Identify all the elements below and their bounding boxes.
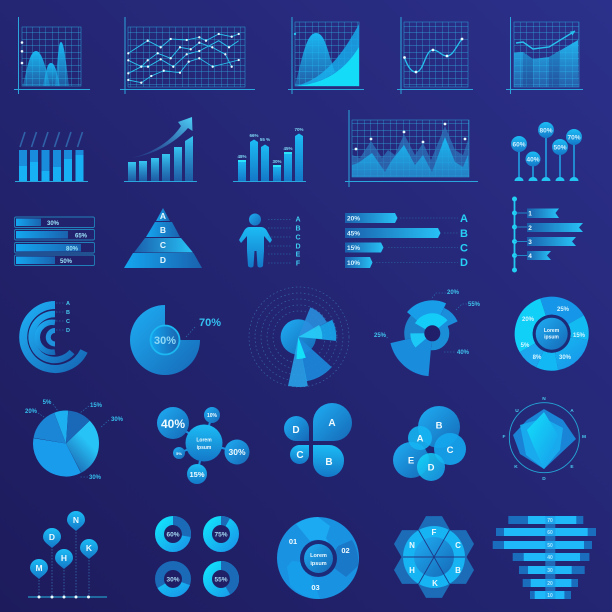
chart: progress bars: 30% bbox=[47, 221, 60, 227]
chart: pyramid: D bbox=[160, 255, 166, 265]
chart: growth bars with arrow bbox=[128, 117, 193, 181]
chart: pyramid: C bbox=[160, 240, 166, 250]
chart: hexagon flower: N bbox=[409, 541, 415, 550]
chart: overlapping circles: D bbox=[428, 462, 435, 474]
chart: swirl circle: 02 bbox=[341, 546, 350, 555]
chart: labelled donut: 5% bbox=[521, 343, 530, 349]
chart: radar: N bbox=[542, 396, 546, 402]
rose hole bbox=[424, 325, 440, 341]
chart: radar bbox=[503, 396, 586, 482]
chart: lollipop percentages: 40% bbox=[526, 156, 540, 164]
chart: balloon pins: N bbox=[73, 515, 79, 525]
chart: overlapping circles: C bbox=[447, 445, 454, 456]
chart: radar: A bbox=[570, 408, 574, 414]
chart: horizontal funnel bars: 40 bbox=[547, 555, 553, 561]
chart: hexagon flower: B bbox=[455, 566, 461, 575]
chart: pie with labels: 30% bbox=[111, 417, 124, 423]
chart: mountain area bbox=[345, 110, 478, 187]
chart: arrow bars ABCD: 15% bbox=[347, 245, 360, 252]
chart: progress bars: 50% bbox=[60, 259, 73, 265]
chart: pie with labels: 20% bbox=[25, 409, 38, 415]
chart: lollipop percentages: 50% bbox=[553, 144, 567, 152]
chart: smooth line bbox=[397, 17, 473, 94]
chart: hexagon flower: C bbox=[455, 541, 461, 550]
chart: labelled donut bbox=[513, 295, 590, 372]
chart: concentric arcs: A bbox=[66, 301, 70, 307]
chart: person with labels: C bbox=[295, 234, 301, 242]
chart: horizontal funnel bars: 20 bbox=[547, 581, 553, 587]
chart: arrow bars ABCD: D bbox=[460, 257, 468, 269]
chart: four small donuts: 60% bbox=[166, 532, 180, 538]
chart: arrow bars ABCD bbox=[345, 213, 468, 269]
chart: overlapping circles: B bbox=[436, 420, 443, 432]
chart: balloon pins: D bbox=[49, 532, 55, 542]
chart: horizontal funnel bars: 50 bbox=[547, 543, 553, 549]
chart: labelled donut: Lorem bbox=[544, 328, 560, 334]
chart: concentric arcs: B bbox=[66, 310, 70, 316]
chart: balloon pins: M bbox=[35, 563, 43, 573]
chart: bubble cluster: 40% bbox=[161, 417, 185, 431]
chart: 30/70 pie: 70% bbox=[199, 317, 221, 329]
chart: labelled donut: 15% bbox=[573, 333, 586, 339]
chart: arrow bars ABCD: 20% bbox=[347, 216, 360, 222]
chart: pie with labels: 5% bbox=[43, 400, 52, 406]
chart: bubble cluster: ipsum bbox=[197, 445, 212, 451]
chart: concentric arcs: C bbox=[66, 319, 70, 325]
chart: 30/70 pie bbox=[130, 305, 221, 375]
chart: pie with labels bbox=[25, 400, 124, 481]
chart: layered area with bell bbox=[288, 17, 364, 94]
chart: concentric arcs bbox=[23, 301, 84, 369]
chart: four small donuts bbox=[156, 520, 234, 596]
chart: swirl circle bbox=[277, 517, 359, 599]
chart: overlapping circles bbox=[393, 406, 466, 481]
chart: arrow bars ABCD: 10% bbox=[347, 260, 360, 267]
arrow: growth bbox=[132, 117, 192, 158]
chart: horizontal funnel bars: 10 bbox=[547, 593, 553, 599]
chart: rose with hole: 55% bbox=[468, 302, 481, 308]
chart: four petals: B bbox=[325, 457, 333, 468]
chart: person with labels: D bbox=[295, 244, 301, 250]
chart: labelled donut: ipsum bbox=[544, 334, 559, 340]
chart: hexagon flower: K bbox=[432, 579, 438, 588]
chart: arrow bars ABCD: A bbox=[460, 213, 468, 225]
chart: hexagon flower bbox=[394, 516, 474, 598]
chart: horizontal funnel bars: 60 bbox=[547, 530, 553, 536]
chart: lollipop percentages: 80% bbox=[539, 128, 553, 134]
chart: lollipop percentages: 70% bbox=[567, 134, 581, 142]
chart: pie with labels: 30% bbox=[89, 475, 102, 481]
chart: person with labels: E bbox=[296, 252, 301, 258]
chart: bubble cluster: 15% bbox=[189, 470, 205, 479]
chart: four small donuts: 75% bbox=[214, 532, 228, 538]
chart: pie with labels: 15% bbox=[90, 403, 103, 409]
chart: lollipop percentages: 60% bbox=[512, 142, 526, 148]
chart: radar: U bbox=[515, 408, 519, 414]
chart: vertical timeline with ribbons: 4 bbox=[528, 253, 532, 260]
chart: four line chart bbox=[120, 17, 255, 94]
chart: overlapping circles: E bbox=[408, 456, 414, 466]
chart: concentric arcs: D bbox=[66, 328, 70, 334]
chart: hexagon flower: H bbox=[409, 566, 415, 575]
chart: bubble cluster: Lorem bbox=[196, 438, 212, 444]
chart: swirl circle: 03 bbox=[311, 583, 320, 592]
chart: labelled donut: 8% bbox=[533, 355, 542, 361]
chart: arrow bars ABCD: B bbox=[460, 228, 468, 240]
chart: column area with trend line bbox=[506, 17, 583, 94]
chart: person with labels bbox=[239, 214, 301, 268]
chart: bubble cluster: 5% bbox=[176, 451, 182, 456]
chart: horizontal funnel bars: 30 bbox=[547, 568, 553, 574]
chart: balloon pins: H bbox=[61, 553, 67, 563]
chart: labelled donut: 20% bbox=[522, 317, 535, 323]
baseline: growth bbox=[124, 180, 197, 182]
chart: horizontal funnel bars: 70 bbox=[547, 518, 553, 524]
chart: horizontal funnel bars bbox=[493, 516, 596, 599]
chart: percent bars bbox=[233, 127, 306, 182]
chart: rose with hole: 40% bbox=[457, 350, 470, 356]
chart: four small donuts: 55% bbox=[214, 576, 228, 584]
chart: bubble cluster bbox=[157, 407, 250, 484]
chart: pyramid: B bbox=[160, 225, 166, 235]
chart: four petals: D bbox=[292, 425, 300, 436]
chart: arrow bars ABCD: 45% bbox=[347, 230, 360, 238]
chart: radar: M bbox=[582, 434, 586, 440]
chart: progress bars: 80% bbox=[66, 246, 79, 252]
chart: swirl circle: 01 bbox=[289, 537, 297, 546]
chart: 30/70 pie: 30% bbox=[154, 335, 176, 347]
chart: rose with hole bbox=[374, 290, 481, 357]
chart: swirl circle: Lorem bbox=[310, 553, 327, 559]
chart: rose with hole: 25% bbox=[374, 333, 387, 339]
chart: four small donuts: 30% bbox=[166, 576, 180, 584]
chart: percent bars: 48% bbox=[237, 154, 247, 159]
chart: pyramid: A bbox=[160, 211, 166, 221]
chart: pyramid bbox=[124, 208, 202, 268]
chart: vertical timeline with ribbons: 1 bbox=[528, 210, 532, 218]
chart: bubble cluster: 30% bbox=[228, 447, 246, 457]
chart: person with labels: F bbox=[296, 260, 301, 268]
chart: lollipop percentages bbox=[511, 122, 582, 181]
chart: balloon pins bbox=[28, 511, 107, 597]
chart: arrow bars ABCD: C bbox=[460, 242, 468, 254]
chart: four petals bbox=[284, 403, 352, 477]
chart: percent bars: 70% bbox=[294, 127, 304, 132]
chart: four petals: C bbox=[296, 450, 304, 461]
chart: labelled donut: 25% bbox=[557, 307, 570, 313]
chart: hexagon flower: F bbox=[432, 528, 437, 537]
chart: labelled donut: 30% bbox=[559, 355, 572, 361]
chart: vertical timeline with ribbons: 3 bbox=[528, 239, 532, 246]
chart: person with labels: B bbox=[295, 226, 301, 232]
chart: rose with hole: 20% bbox=[447, 290, 460, 296]
chart: dotted radial rose bbox=[249, 287, 349, 387]
chart: radar: K bbox=[514, 464, 518, 470]
chart: stacked bars bbox=[15, 132, 88, 182]
chart: radar: E bbox=[570, 464, 574, 470]
chart: person with labels: A bbox=[295, 216, 301, 224]
chart: percent bars: 66% bbox=[249, 133, 259, 138]
chart: balloon pins: K bbox=[86, 543, 93, 553]
chart: percent bars: 30% bbox=[272, 159, 282, 164]
chart: overlapping circles: A bbox=[417, 434, 424, 444]
chart: bell area chart bbox=[14, 17, 90, 94]
chart: four petals: A bbox=[328, 418, 336, 429]
chart: radar: F bbox=[503, 434, 506, 440]
chart: vertical timeline with ribbons: 2 bbox=[528, 225, 532, 232]
chart: bubble cluster: 10% bbox=[207, 413, 218, 419]
chart: progress bars bbox=[14, 217, 94, 266]
chart: percent bars: 55 % bbox=[260, 137, 270, 142]
chart: progress bars: 65% bbox=[75, 234, 88, 240]
chart: radar: D bbox=[542, 476, 546, 482]
chart: vertical timeline with ribbons bbox=[514, 199, 583, 270]
chart: percent bars: 45% bbox=[283, 146, 293, 151]
chart: swirl circle: ipsum bbox=[310, 561, 327, 567]
